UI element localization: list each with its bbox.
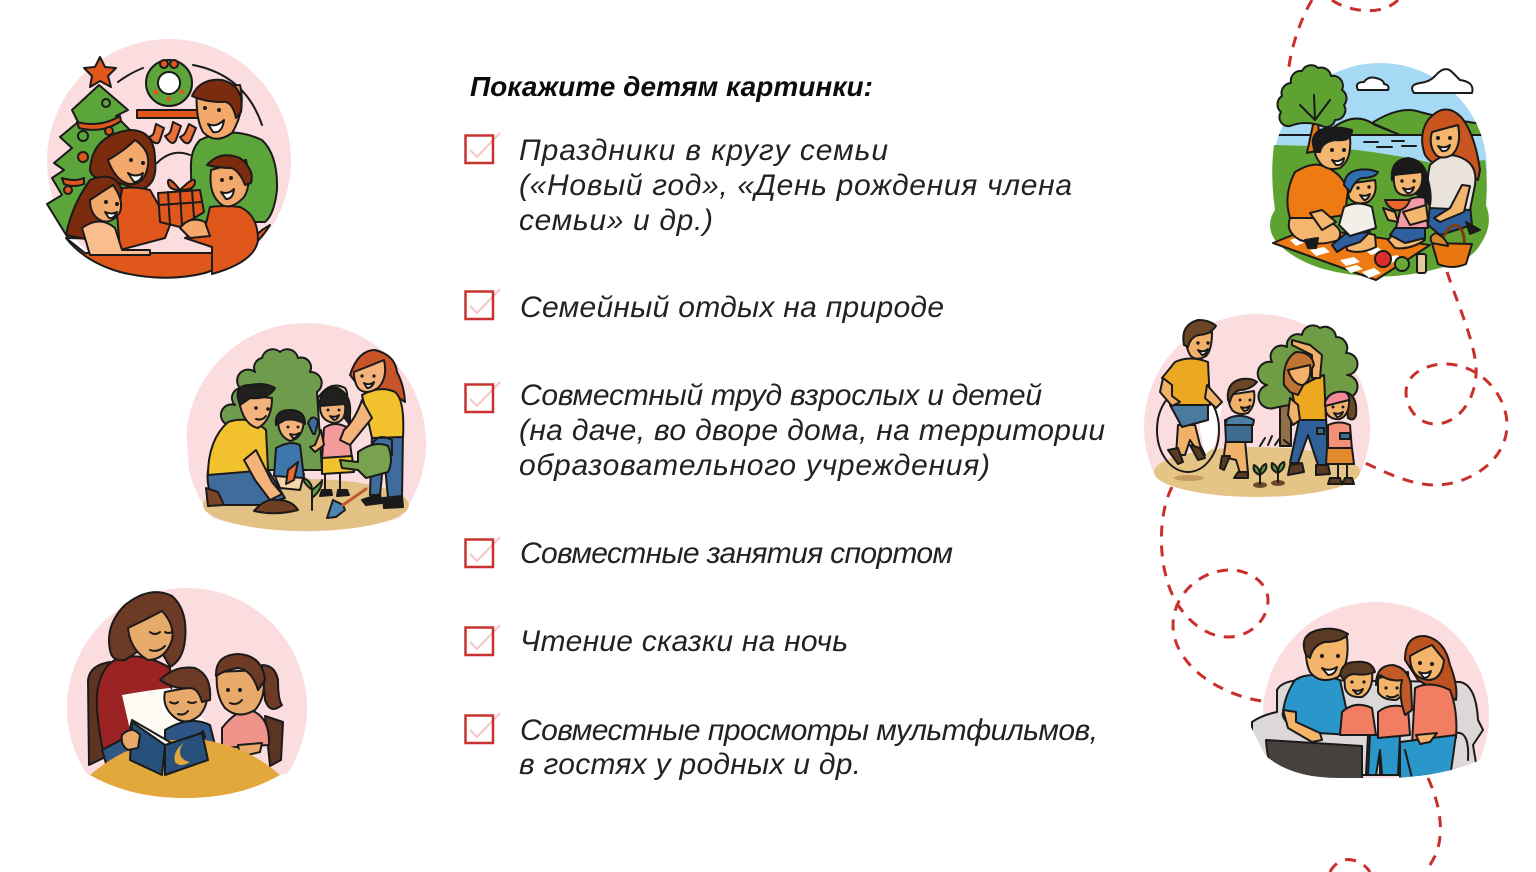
father <box>206 384 285 506</box>
wreath <box>146 60 192 106</box>
mother <box>97 592 185 770</box>
ground <box>203 479 409 531</box>
mother <box>1422 109 1480 235</box>
TV <box>1266 740 1362 780</box>
dashed decorative route: upper right <box>1288 0 1507 485</box>
star <box>84 57 116 87</box>
chairs <box>88 662 120 765</box>
illustration: family picnic <box>1270 60 1490 280</box>
heading: Покажите детям картинки: <box>470 71 873 102</box>
wall arcs <box>118 65 262 163</box>
item: joint work: образовательного учреждения) <box>519 449 990 482</box>
pillow <box>122 688 212 745</box>
illustration: family holiday <box>47 39 291 283</box>
illustration: bedtime reading <box>67 588 307 798</box>
watering can <box>340 437 392 478</box>
ground <box>1154 447 1360 497</box>
bush <box>221 349 322 470</box>
boy <box>1220 379 1257 478</box>
boy <box>1339 660 1381 774</box>
item: bedtime story: Чтение сказки на ночь <box>520 625 848 658</box>
father <box>1283 629 1352 742</box>
girl <box>1383 158 1431 248</box>
father <box>191 80 277 222</box>
boy <box>160 668 215 755</box>
sky, hills, lake <box>1270 60 1490 175</box>
item: holidays <box>466 133 1072 237</box>
checkered blanket <box>1273 228 1430 280</box>
fruits and bottle <box>1375 251 1426 273</box>
gift box <box>158 180 204 227</box>
illustration: family sport <box>1144 314 1370 497</box>
seedlings and grass <box>1174 436 1290 488</box>
checklist <box>466 133 1105 781</box>
girl <box>1317 392 1356 484</box>
dashed decorative route: lower right <box>1161 487 1440 872</box>
book with moon <box>130 720 208 775</box>
mother <box>350 350 405 508</box>
mantel <box>137 110 202 118</box>
girl <box>216 654 282 757</box>
tree <box>1277 65 1347 153</box>
mother <box>90 130 170 250</box>
illustration: watching cartoons <box>1251 602 1489 778</box>
girl <box>308 386 354 496</box>
sprout <box>304 478 322 510</box>
basket <box>1431 225 1472 267</box>
boy <box>274 410 305 490</box>
item: holidays: семьи» и др.) <box>519 204 713 237</box>
girl <box>66 177 150 255</box>
trowel <box>327 489 366 518</box>
boy <box>180 155 258 274</box>
blanket <box>90 740 280 798</box>
item: joint work: Совместный труд взрослых и детей <box>520 379 1042 412</box>
mother's hand <box>122 730 140 750</box>
father with rope <box>1157 320 1222 472</box>
item: cartoons: в гостях у родных и др. <box>519 748 861 781</box>
item: joint work <box>466 379 1105 482</box>
item: cartoons: Совместные просмотры мультфильмов, <box>520 714 1098 747</box>
soil mound <box>254 500 298 513</box>
item: holidays: («Новый год», «День рождения члена <box>519 169 1072 202</box>
father <box>1287 128 1352 248</box>
clouds <box>1357 69 1472 93</box>
stockings <box>149 122 196 143</box>
item: sports: Совместные занятия спортом <box>520 537 953 570</box>
table and bottom band <box>66 225 270 278</box>
item: joint work: (на даче, во дворе дома, на территории <box>519 414 1105 447</box>
grass <box>1270 145 1489 276</box>
girl <box>1368 665 1412 775</box>
boy <box>1332 169 1378 252</box>
tree <box>1258 325 1358 446</box>
mother <box>1400 636 1456 778</box>
sofa <box>1252 680 1483 775</box>
item: holidays: Праздники в кругу семьи <box>519 134 888 167</box>
woman <box>1284 340 1330 475</box>
illustration: gardening together <box>186 323 426 532</box>
item: cartoons <box>466 713 1098 781</box>
item: nature: Семейный отдых на природе <box>520 291 944 324</box>
mother's arm <box>340 400 372 445</box>
christmas tree <box>47 85 140 240</box>
